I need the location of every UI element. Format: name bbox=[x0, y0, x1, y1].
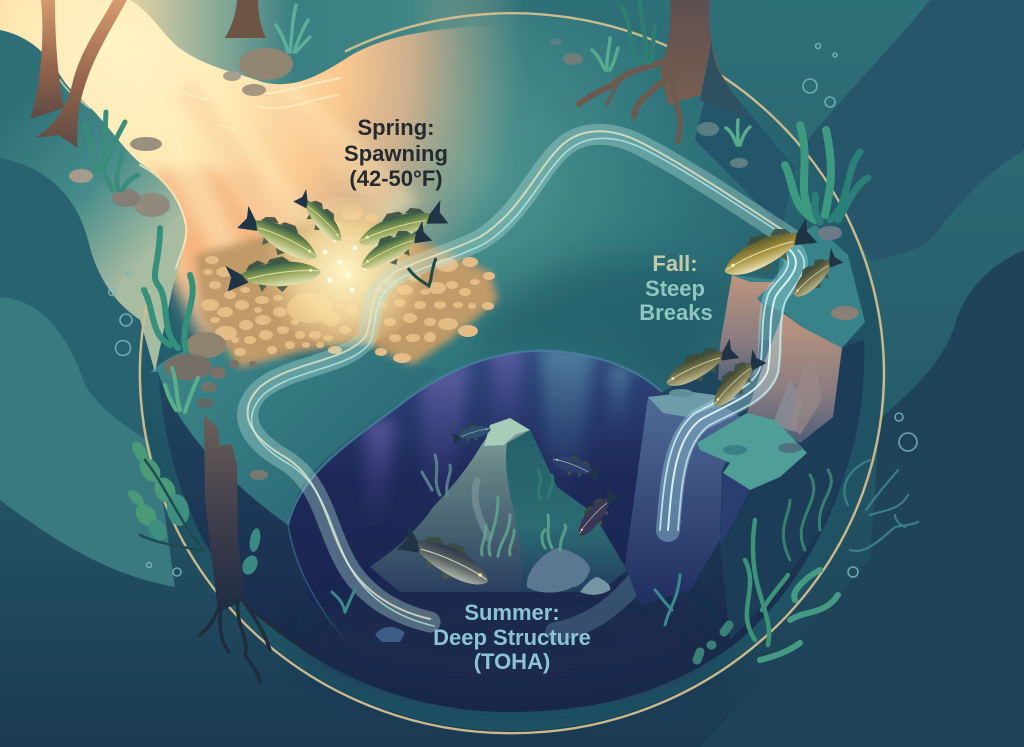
tree: left trunk bbox=[30, 0, 64, 119]
bubbles bbox=[108, 44, 917, 577]
tree: top middle trunk bbox=[225, 0, 266, 38]
top left shore bbox=[0, 0, 540, 372]
gravel glow bbox=[260, 197, 430, 347]
tree: top right with roots bbox=[579, 0, 750, 142]
plant: small coral bbox=[332, 575, 680, 625]
label: summer deep structure: Summer: bbox=[464, 600, 560, 625]
upper shelf bbox=[733, 225, 865, 348]
tree: left stump bbox=[204, 415, 245, 612]
fall stream on cliff bbox=[660, 250, 804, 530]
submerged mountain bbox=[370, 418, 627, 642]
gravel spawning bed bbox=[195, 197, 498, 368]
plant: top left grass bbox=[85, 112, 138, 190]
plant: lower left leaves bbox=[125, 439, 262, 577]
plant: top right grass bbox=[622, 0, 655, 63]
label: fall steep breaks: Steep bbox=[645, 276, 705, 301]
panel: left shelf bbox=[150, 343, 440, 525]
stump roots bbox=[200, 600, 315, 682]
dark right wall bbox=[720, 340, 864, 640]
trees bbox=[30, 0, 750, 612]
cliff breaks bbox=[625, 225, 865, 640]
middle teal shelf bbox=[697, 413, 807, 490]
fish: spring spawning group bbox=[224, 188, 451, 301]
label: fall steep breaks: Breaks bbox=[639, 300, 713, 325]
label: fall steep breaks: Fall: bbox=[652, 251, 698, 276]
plants bbox=[85, 0, 918, 660]
label: spring spawning: (42-50°F) bbox=[349, 166, 443, 191]
shore stones bbox=[69, 39, 859, 480]
fish: fall group bbox=[660, 217, 848, 414]
tan cliff right bbox=[747, 313, 842, 443]
fish: summer group bbox=[393, 420, 625, 595]
panel: circular lake plateau bbox=[142, 15, 882, 731]
panel: dark basin bbox=[158, 340, 864, 712]
light rays in deep water bbox=[360, 351, 634, 507]
gold ring bbox=[140, 13, 884, 733]
label: spring spawning: Spring: bbox=[358, 115, 434, 140]
seaweed in deep bbox=[422, 455, 566, 556]
label: summer deep structure: Deep Structure bbox=[433, 625, 591, 650]
label: summer deep structure: (TOHA) bbox=[474, 649, 550, 674]
plant: left kelp bbox=[144, 228, 193, 350]
label: spring spawning: Spawning bbox=[344, 141, 448, 166]
sunlight glow bbox=[0, 0, 560, 340]
tan cliff left bbox=[718, 275, 775, 385]
plant: bottom right seaweed bbox=[745, 520, 788, 645]
tree: leaning trunk bbox=[35, 0, 127, 148]
panel: deep water summer zone bbox=[288, 340, 710, 695]
lower blue cliff bbox=[625, 392, 745, 605]
migration path bbox=[248, 131, 794, 632]
rocks bbox=[527, 548, 590, 593]
plant: right kelp bbox=[785, 125, 831, 220]
rounded pods bbox=[697, 625, 729, 660]
